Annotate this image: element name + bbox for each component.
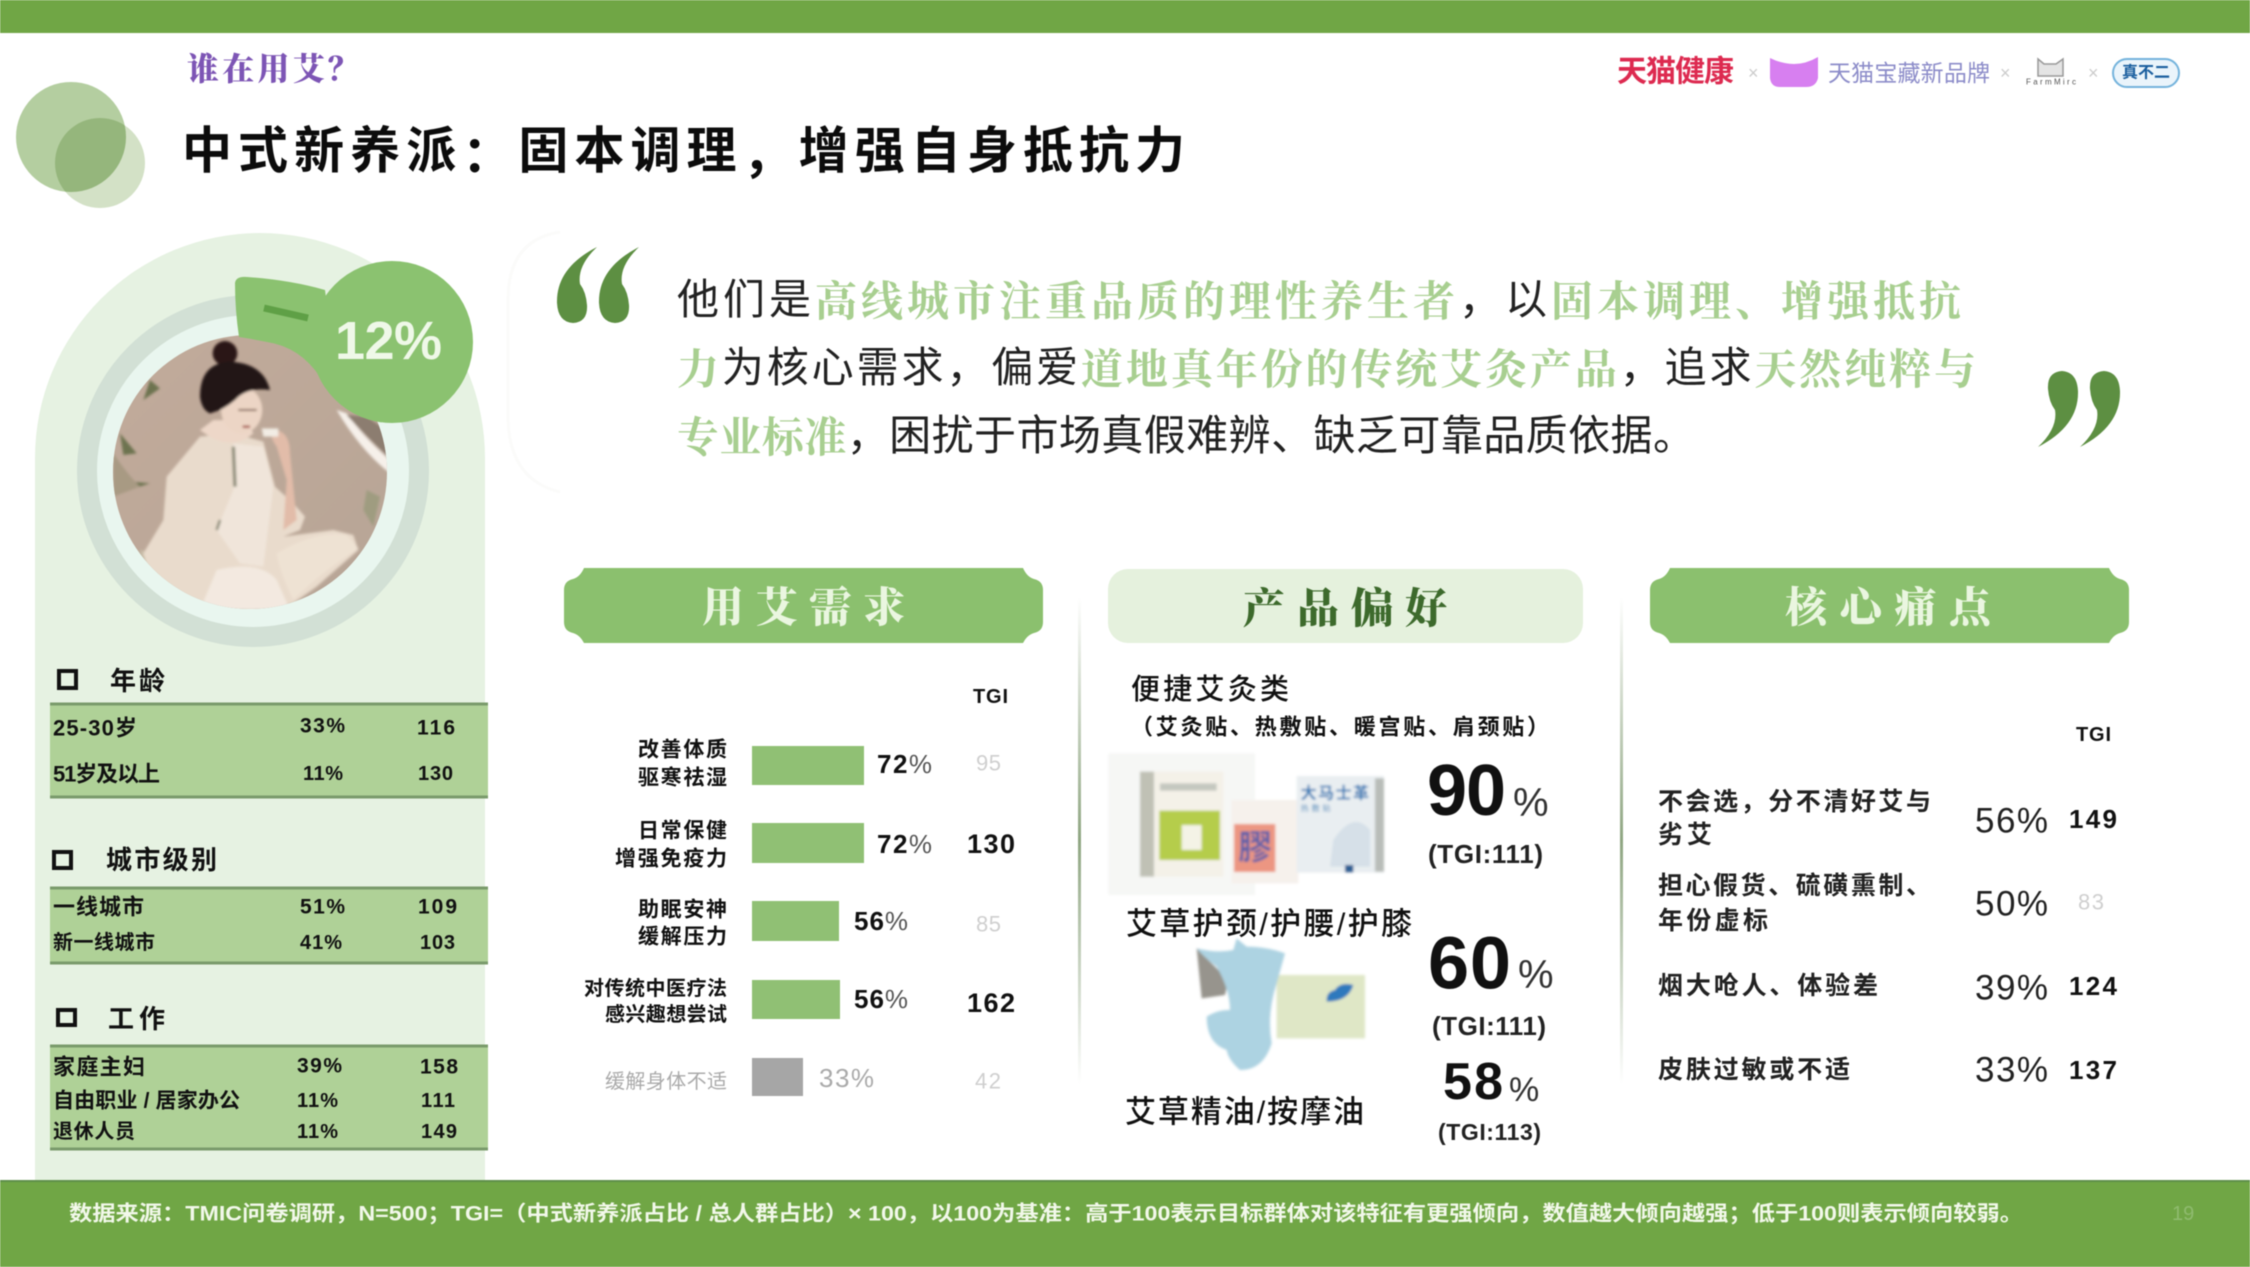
- heading: 工作: [108, 1004, 165, 1034]
- table: 25-30岁: [53, 716, 137, 740]
- item: 艾草精油/按摩油: 艾草精油/按摩油: [1125, 1094, 1364, 1130]
- row: 担心假货: 50%: [1975, 884, 2048, 924]
- TGI column header: TGI: [973, 686, 1008, 708]
- heading: 产品偏好: [1108, 569, 1583, 643]
- row: 烟大呛人: [1658, 968, 2118, 1008]
- row: 助眠安神: 助眠安神: [638, 898, 727, 922]
- row: 日常保健: 增强免疫力: [615, 848, 727, 870]
- item: 艾草护颈/护腰/护膝: %: [1518, 953, 1554, 997]
- checkbox: [58, 1010, 75, 1025]
- panel: persona quote: [508, 232, 2120, 492]
- heading: 城市级别: [106, 845, 217, 875]
- table: 111: [421, 1090, 455, 1112]
- item: 便捷艾灸类: （艾灸贴、热敷贴、暖宫贴、肩颈贴）: [1131, 714, 1549, 740]
- heading: 核心痛点: [1650, 568, 2129, 643]
- product image: moxibustion patches: 膠: [1238, 830, 1272, 867]
- logo: 天猫健康: 天猫健康: [1617, 56, 1734, 88]
- value: 60%: 60: [1428, 922, 1511, 1004]
- table: 109: [418, 896, 457, 918]
- table: 33%: [300, 714, 345, 738]
- partner logos: ×: [1748, 63, 1759, 83]
- table: 家庭主妇: [53, 1054, 145, 1080]
- table: 51岁及以上: [53, 762, 160, 786]
- item: 便捷艾灸类: %: [1513, 781, 1549, 825]
- product image: neck support: [1197, 938, 1365, 1070]
- table: 新一线城市: [53, 930, 155, 954]
- leaf vein: [264, 308, 308, 318]
- row: 日常保健: 日常保健: [638, 820, 727, 842]
- divider: [1620, 597, 1623, 1084]
- icon: closing quote: [2038, 371, 2120, 447]
- group: age: [50, 666, 488, 798]
- partner logos: ×: [2000, 63, 2011, 83]
- row: 担心假货: [1658, 872, 2104, 935]
- panel: usage needs: [564, 568, 1043, 1096]
- item: 便捷艾灸类: (TGI:111): [1428, 839, 1543, 869]
- checkbox: [59, 671, 76, 688]
- table: 103: [420, 932, 455, 954]
- item: 便捷艾灸类: [1108, 673, 1549, 895]
- table: 11%: [297, 1121, 338, 1143]
- bar chart: [584, 738, 1015, 1096]
- row: 缓解身体不适: 42: [975, 1068, 1001, 1094]
- value: 58%: 58: [1443, 1053, 1503, 1111]
- logo: 真不二: [2113, 59, 2179, 87]
- row: 日常保健: 130: [967, 829, 1015, 859]
- group: city tier: [50, 845, 488, 964]
- decorative circles beside title: [16, 82, 145, 208]
- row: 改善体质: 95: [976, 750, 1001, 776]
- item: 艾草护颈/护腰/护膝: 艾草护颈/护腰/护膝: [1126, 906, 1412, 942]
- title: 中式新养派：固本调理，增强自身抵抗力: [182, 115, 1185, 187]
- logo: 真不二: 真不二: [2122, 64, 2170, 82]
- row: 烟大呛人: 124: [2069, 971, 2118, 1001]
- partner logos: ×: [2088, 63, 2099, 83]
- table: [50, 704, 488, 798]
- item: 艾草精油/按摩油: (TGI:113): [1438, 1119, 1541, 1145]
- row: 不会选: 56%: [1975, 802, 2048, 840]
- row: 缓解身体不适: 缓解身体不适: [605, 1070, 727, 1093]
- panel: core pain points: [1650, 568, 2129, 1090]
- row: 助眠安神: [638, 898, 1001, 948]
- row: 日常保健: 72%: [877, 829, 932, 859]
- row: 对传统中医疗法: 162: [967, 988, 1015, 1018]
- product image: moxibustion patches: 大马士革: [1301, 784, 1369, 802]
- logo: cat icon: [1770, 57, 1818, 87]
- heading: 用艾需求: [564, 568, 1043, 643]
- TGI column header: TGI: [2076, 724, 2111, 746]
- row: 改善体质: [638, 738, 1001, 790]
- top green bar: [0, 0, 2250, 33]
- divider: [1078, 597, 1081, 1084]
- row: 皮肤过敏: 137: [2069, 1055, 2117, 1085]
- table: 一线城市: [53, 894, 144, 920]
- share value: 12%: [335, 311, 442, 371]
- table: 51%: [300, 896, 345, 918]
- row: 皮肤过敏: [1658, 1050, 2117, 1090]
- table: 11%: [297, 1090, 338, 1112]
- row: 烟大呛人: 烟大呛人、体验差: [1658, 971, 1878, 1000]
- logo: TMIC cat: FarmMirc: [2026, 78, 2076, 86]
- quote text: 专业标准，困扰于市场真假难辨、缺乏可靠品质依据。: [677, 405, 1695, 465]
- section tag: 谁在用艾: 谁在用艾？: [187, 44, 360, 90]
- product image: moxibustion patches: [1108, 753, 1384, 895]
- table: [50, 888, 488, 964]
- row: 不会选: 149: [2069, 804, 2117, 834]
- panel: persona profile: [35, 233, 488, 1182]
- table: 158: [420, 1056, 458, 1078]
- row: 改善体质: 改善体质: [638, 738, 727, 762]
- logo: 天猫宝藏新品牌: 天猫宝藏新品牌: [1828, 60, 1990, 86]
- logo: TMIC cat: [2026, 59, 2076, 86]
- row: 不会选: 劣艾: [1658, 821, 1712, 849]
- row: 改善体质: 72%: [877, 749, 932, 779]
- row: 对传统中医疗法: 对传统中医疗法: [584, 976, 727, 1000]
- row: 担心假货: 年份虚标: [1658, 907, 1768, 935]
- item: 便捷艾灸类: 便捷艾灸类: [1131, 673, 1289, 706]
- row: 烟大呛人: 39%: [1975, 968, 2048, 1008]
- row: 对传统中医疗法: 56%: [854, 984, 908, 1014]
- checkbox: [54, 852, 71, 868]
- row: 担心假货: 担心假货、硫磺熏制、: [1658, 872, 1931, 900]
- footer band: [0, 1180, 2250, 1267]
- heading: 年龄: [110, 666, 165, 696]
- product image: moxibustion patches: 热敷贴: [1301, 803, 1331, 813]
- row: 担心假货: 83: [2078, 890, 2104, 914]
- item: 艾草护颈/护腰/护膝: (TGI:111): [1432, 1011, 1546, 1041]
- page number: 19: [2172, 1203, 2194, 1225]
- row: 皮肤过敏: 皮肤过敏或不适: [1658, 1056, 1850, 1084]
- table: 149: [421, 1121, 457, 1143]
- table: 退休人员: [53, 1120, 135, 1143]
- row: 缓解身体不适: [605, 1058, 1001, 1096]
- share badge: [235, 261, 473, 423]
- heading: 核心痛点: 核心痛点: [1785, 575, 1995, 635]
- heading: 用艾需求: 用艾需求: [702, 575, 905, 635]
- row: 不会选: 不会选，分不清好艾与: [1658, 788, 1931, 816]
- quote text: [677, 269, 1976, 465]
- row: 对传统中医疗法: 感兴趣想尝试: [605, 1003, 727, 1026]
- data source note: 数据来源：TMIC问卷调研，N=500；TGI=（中式新养派占比 / 总人群占比）× 100，以100为基准：高于100表示目标群体对该特征有更强倾向，数值越大倾向越强；低于100则表示倾向较弱。: [69, 1202, 2023, 1226]
- heading: 产品偏好: 产品偏好: [1243, 576, 1447, 636]
- row: 不会选: [1658, 788, 2117, 849]
- row: 助眠安神: 85: [976, 912, 1001, 936]
- icon: opening quote: [557, 247, 639, 323]
- row: 日常保健: [615, 820, 1015, 870]
- item: 艾草护颈/护腰/护膝: [1126, 906, 1554, 1070]
- table: 39%: [297, 1054, 342, 1078]
- quote text: 他们是高线城市注重品质的理性养生者，以固本调理、增强抵抗: [677, 269, 1961, 329]
- row: 助眠安神: 56%: [854, 906, 908, 936]
- row: 缓解身体不适: 33%: [819, 1063, 874, 1093]
- item: 艾草精油/按摩油: [1125, 1053, 1541, 1145]
- item: 艾草精油/按摩油: %: [1509, 1071, 1539, 1109]
- partner logos: [1617, 56, 2179, 88]
- table: 116: [417, 716, 455, 740]
- value: 90%: 90: [1427, 751, 1506, 831]
- row: 对传统中医疗法: [584, 976, 1015, 1026]
- table: 41%: [300, 932, 342, 954]
- portrait illustration: [110, 330, 390, 615]
- table: 130: [418, 763, 453, 785]
- table: [50, 1046, 488, 1150]
- panel: product preference: [1108, 569, 1583, 1145]
- group: occupation: [50, 1004, 488, 1150]
- row: 改善体质: 驱寒祛湿: [638, 766, 727, 790]
- quote text: 力为核心需求，偏爱道地真年份的传统艾灸产品，追求天然纯粹与: [677, 337, 1976, 397]
- table: 自由职业 / 居家办公: [53, 1088, 240, 1112]
- table: 11%: [303, 763, 343, 785]
- row: 皮肤过敏: 33%: [1975, 1050, 2048, 1090]
- row: 助眠安神: 缓解压力: [638, 926, 727, 948]
- photo ring: [87, 305, 419, 637]
